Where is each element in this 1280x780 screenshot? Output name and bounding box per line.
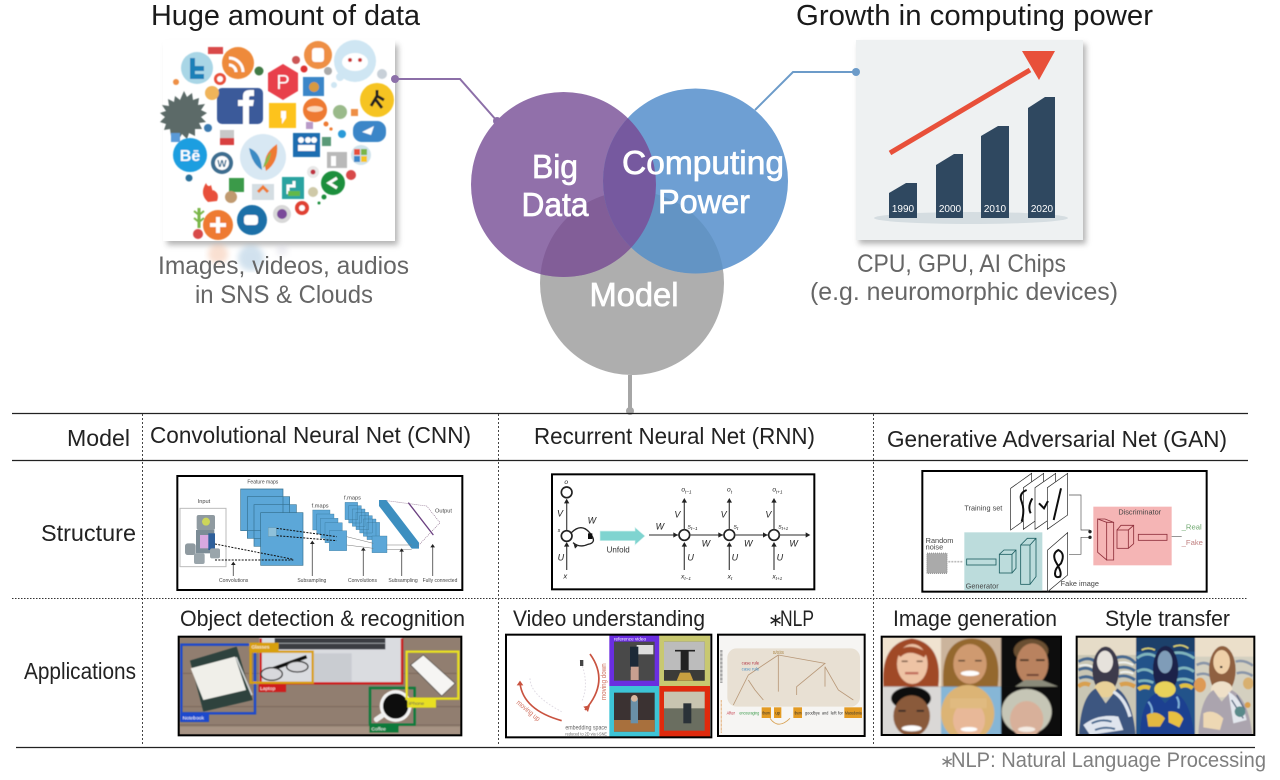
caption: images, videos, audios: in SNS & Clouds (195, 281, 373, 309)
diagram: rnn structure: W (744, 539, 754, 549)
caption: images, videos, audios (158, 252, 409, 309)
panel: computing growth bar chart: 2000 (939, 204, 962, 215)
image: video understanding embedding: embedding space (565, 726, 608, 732)
image: nlp parse tree: encouraging (739, 710, 759, 716)
caption: cpu gpu ai chips (810, 250, 1118, 306)
diagram: cnn structure: f.maps (312, 503, 329, 509)
heading: huge amount of data: Huge amount of data (151, 0, 421, 32)
diagram: gan structure: Generator (966, 582, 999, 591)
row label: structure: Structure (41, 520, 136, 546)
diagram: rnn structure: o (727, 487, 731, 494)
diagram: rnn structure: t (731, 489, 733, 494)
heading: growth in computing power: Growth in computing power (796, 0, 1153, 32)
image: object detection desk scene: Glasses (251, 645, 270, 651)
application heading: video understanding: Video understanding (513, 606, 705, 631)
connector: model circle to table (626, 375, 634, 415)
diagram: rnn structure: t−1 (684, 576, 691, 581)
diagram: cnn structure: Subsampling (297, 578, 326, 584)
image: object detection desk scene: Notebook (183, 716, 205, 722)
diagram: rnn structure: U (732, 553, 739, 563)
image: nlp parse tree: Macedonia (845, 710, 862, 715)
diagram: cnn structure: Input (198, 499, 211, 505)
diagram: cnn structure: Convolutions (348, 578, 377, 584)
diagram: rnn structure: t+1 (776, 576, 783, 581)
panel: social media icon cloud: W (217, 159, 227, 170)
image: video understanding embedding (506, 635, 711, 737)
panel: social media icon cloud: Bē (180, 148, 200, 165)
diagram: rnn structure: o (681, 487, 685, 494)
image: video understanding embedding: moving down (599, 663, 608, 700)
diagram: rnn structure: U (777, 553, 784, 563)
diagram: cnn structure (177, 476, 462, 590)
venn diagram: big data, computing power, model: Big (532, 148, 578, 185)
diagram: rnn structure: x (562, 572, 568, 581)
image: nlp parse tree: left (831, 710, 837, 715)
diagram: gan structure: Random (926, 536, 953, 545)
diagram: cnn structure: f.maps (344, 495, 361, 501)
table grid lines (12, 414, 1255, 748)
image: nlp parse tree (718, 635, 865, 736)
diagram: cnn structure: Fully connected (423, 578, 457, 584)
image: nlp parse tree: them (762, 710, 770, 715)
column heading: cnn: Convolutional Neural Net (CNN) (150, 422, 471, 448)
diagram: rnn structure: U (687, 553, 694, 563)
footnote: nlp definition: ∗ (940, 752, 954, 771)
diagram: rnn structure: V (765, 509, 772, 519)
image: nlp parse tree: case rule (742, 660, 760, 665)
diagram: cnn structure: Feature maps (247, 480, 278, 486)
image: video understanding embedding: moving up (515, 698, 542, 723)
diagram: gan structure: _Fake (1181, 538, 1203, 547)
venn diagram: big data, computing power, model: Model (590, 276, 678, 313)
diagram: cnn structure: Subsampling (388, 578, 418, 584)
diagram: rnn structure: Unfold (607, 545, 630, 554)
diagram: rnn structure: W (656, 521, 666, 531)
image: nlp parse tree: them (795, 710, 802, 715)
diagram: rnn structure: t+1 (782, 526, 789, 531)
panel: computing growth bar chart: 1990 (892, 204, 915, 215)
diagram: rnn structure: W (789, 539, 799, 549)
image: mona lisa style transfer (1077, 637, 1254, 735)
diagram: rnn structure: V (674, 509, 681, 519)
image: nlp parse tree: S/S\S (773, 650, 784, 655)
venn diagram: big data, computing power, model: Computing (622, 144, 784, 181)
caption: images, videos, audios: Images, videos, audios (158, 252, 409, 280)
diagram: rnn structure: t (731, 576, 733, 581)
application heading: style transfer: Style transfer (1105, 606, 1230, 631)
diagram: rnn structure: t−1 (691, 526, 698, 531)
caption: cpu gpu ai chips: (e.g. neuromorphic devices) (810, 278, 1118, 306)
diagram: rnn structure: t+1 (776, 489, 783, 494)
venn diagram: big data, computing power, model: Data (522, 186, 589, 223)
diagram: rnn structure: W (588, 515, 598, 525)
row label: model: Model (67, 425, 130, 451)
image: video understanding embedding: reference video (614, 636, 647, 641)
diagram: rnn structure: x (728, 573, 731, 580)
diagram: rnn structure: t (737, 526, 739, 531)
image: nlp parse tree: and (822, 710, 829, 715)
image: nlp parse tree: After (727, 710, 735, 716)
image: object detection desk scene: Laptop (260, 686, 275, 692)
image: object detection desk scene (179, 637, 461, 735)
diagram: rnn structure: s (778, 523, 782, 530)
diagram: rnn structure: W (702, 539, 712, 549)
diagram: cnn structure: Output (435, 508, 452, 514)
image: nlp parse tree: up (775, 710, 781, 715)
application heading: nlp: NLP (780, 606, 814, 631)
diagram: rnn structure: o (772, 487, 776, 494)
connector: computing circle to chart (755, 68, 860, 110)
diagram: gan structure: noise (926, 543, 943, 552)
diagram: rnn structure: U (558, 553, 565, 563)
panel: social media icon cloud: P (276, 72, 290, 94)
image: video understanding embedding: reduced to 2D via t-SNE (565, 731, 607, 736)
application heading: nlp (768, 606, 814, 631)
footnote: nlp definition: NLP: Natural Language Processing (951, 749, 1266, 772)
row label: applications: Applications (24, 658, 136, 684)
image: object detection desk scene: Coffee (371, 727, 386, 733)
diagram: rnn structure: V (721, 509, 728, 519)
caption: cpu gpu ai chips: CPU, GPU, AI Chips (857, 250, 1066, 278)
application heading: object detection: Object detection & recognition (180, 606, 465, 631)
connector: data image to big data circle (391, 75, 501, 125)
diagram: rnn structure: x (772, 573, 776, 580)
diagram: cnn structure: Convolutions (219, 578, 248, 584)
image: generated faces grid (882, 637, 1061, 742)
diagram: rnn structure: t−1 (685, 489, 692, 494)
diagram: gan structure: Training set (964, 503, 1002, 512)
diagram: rnn structure: o (564, 479, 568, 486)
application heading: image generation: Image generation (893, 606, 1057, 631)
diagram: gan structure: Fake image (1061, 579, 1099, 588)
column heading: rnn: Recurrent Neural Net (RNN) (534, 423, 815, 449)
diagram: gan structure (922, 471, 1207, 592)
diagram: rnn structure: s (558, 528, 561, 534)
panel: computing growth bar chart (856, 40, 1086, 244)
panel: social media icon cloud (160, 40, 398, 245)
diagram: rnn structure: V (557, 509, 564, 519)
diagram: gan structure: _Real (1181, 522, 1202, 531)
panel: computing growth bar chart: 2010 (984, 204, 1007, 215)
venn diagram: big data, computing power, model (471, 88, 788, 375)
diagram: rnn structure: s (734, 523, 737, 530)
diagram: rnn structure (552, 474, 814, 589)
image: nlp parse tree: for (838, 710, 844, 715)
decorative reflection of icon cloud (208, 244, 288, 271)
image: nlp parse tree: case rule (742, 667, 760, 672)
image: object detection desk scene: iPhone (409, 701, 424, 707)
column heading: gan: Generative Adversarial Net (GAN) (887, 426, 1227, 452)
diagram: rnn structure: s (688, 523, 691, 530)
venn diagram: big data, computing power, model: Power (658, 183, 750, 220)
diagram: gan structure: Discriminator (1118, 507, 1162, 516)
diagram: rnn structure: x (681, 573, 684, 580)
application heading: nlp: ∗ (768, 610, 783, 630)
panel: computing growth bar chart: 2020 (1031, 204, 1054, 215)
image: nlp parse tree: goodbye (805, 710, 821, 715)
